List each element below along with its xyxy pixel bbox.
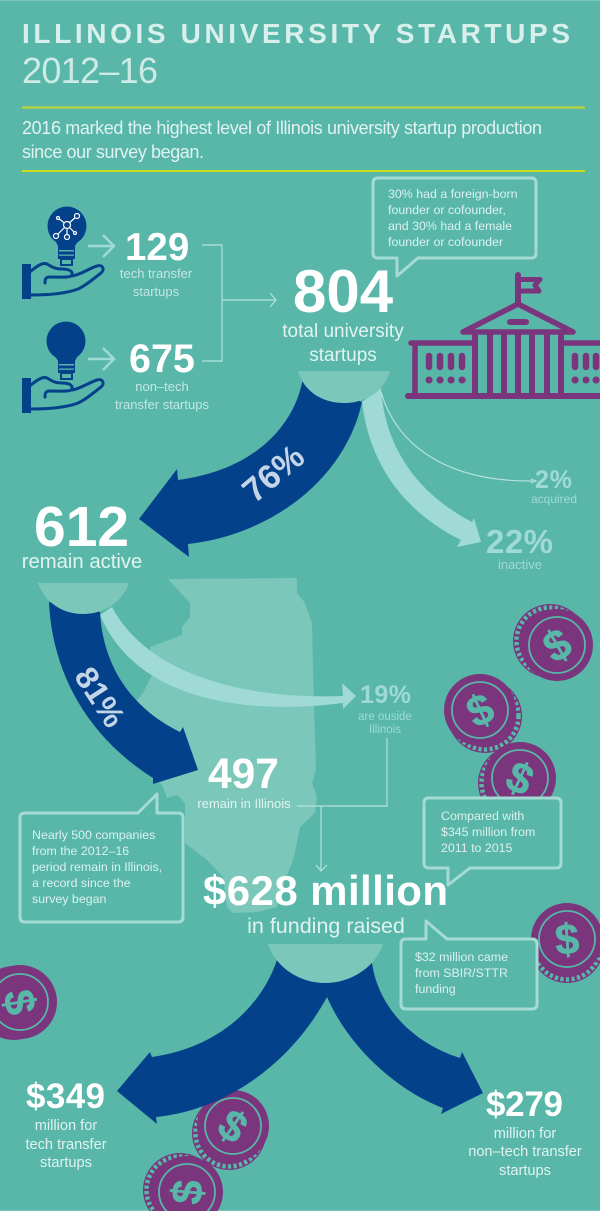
stat: 497 remain in Illinois: 497 [208,751,279,798]
callout: SBIR/STTR funding: funding [415,982,456,996]
stat: $349 million for tech transfer: million for [35,1118,97,1134]
coin 7: $ [163,1178,213,1206]
stat: $279 million for non-tech transfer [468,1085,582,1179]
coin 6 [192,1090,269,1170]
callout: SBIR/STTR funding [401,921,537,1009]
coin 1: $ [535,619,580,673]
arrow: 2 percent acquired [381,392,536,483]
arrow: 22 percent inactive [362,388,481,547]
icon: tech transfer bulb in hand [22,206,103,299]
stat: 497 remain in Illinois: remain in Illinois [197,796,291,811]
callout: compared with prior period: Compared with [441,809,524,823]
callout: 500 companies [20,794,183,922]
icon: non-tech transfer bulb in hand [22,322,103,413]
stat: 675 non-tech transfer startups [115,337,209,412]
callout: founders: founder or cofounder [388,235,503,249]
arrow: connector to funding [297,738,387,871]
stat: 675 non-tech transfer startups: transfer startups [115,397,209,412]
callout: founders: founder or cofounder, [388,203,506,217]
stat: $349 million for tech transfer: startups [40,1155,92,1171]
subtitle: years: 2012–16 [22,50,158,91]
stat: 22% inactive: inactive [498,557,542,572]
callout: compared with prior period: $345 million from [441,825,535,839]
callout: 500 companies: survey began [32,892,107,906]
stat: $279 million for non-tech transfer: non–tech transfer [468,1144,582,1160]
arrow: left funding to tech transfer [117,955,345,1124]
stat: $279 million for non-tech transfer: $279 [486,1085,563,1124]
coin 4: $ [553,915,581,965]
callout: 500 companies: period remain in Illinois, [32,860,162,874]
stat: $279 million for non-tech transfer: startups [499,1163,551,1179]
arrow: bulb to 675 [88,348,114,370]
coin 3: $ [499,752,541,806]
intro text [22,118,542,162]
bowl: funding raised [268,944,383,983]
stat: 804 total university startups: 804 [293,258,394,325]
label: 81%: 81% [67,660,133,734]
stat: 804 total university startups [282,258,404,366]
stat: 2% acquired: acquired [531,492,577,506]
coin 4 [530,903,600,983]
stat: 2% acquired: 2% [535,466,572,494]
stat: 2% acquired [531,466,577,506]
stat: 675 non-tech transfer startups: non–tech [135,379,189,394]
stat: 19% are outside Illinois: are ouside [358,711,412,723]
callout: 500 companies: a record since the [32,876,131,890]
stat: $628 million in funding raised: in funding raised [247,914,405,938]
callout: compared with prior period: 2011 to 2015 [441,841,513,855]
icon: university building [408,275,600,396]
stat: 129 tech transfer startups: startups [133,284,180,299]
stat: $279 million for non-tech transfer: million for [494,1126,556,1142]
stat: 497 remain in Illinois [197,751,291,811]
stat: $349 million for tech transfer: tech transfer [25,1137,107,1153]
coin 1 [513,604,593,681]
stat: $349 million for tech transfer: $349 [26,1077,105,1116]
label: 76%: 76% [235,437,312,510]
arrow: 81 percent remain in Illinois [49,602,198,784]
title: ILLINOIS UNIVERSITY STARTUPS [22,18,570,49]
arrow: right funding to non-tech transfer [300,955,483,1114]
stat: 612 remain active: remain active [22,551,142,573]
callout: founders: and 30% had a female [388,219,512,233]
callout: 500 companies: Nearly 500 companies [32,828,155,842]
stat: 22% inactive: 22% [486,523,553,560]
coin 3 [478,742,556,820]
stat: 612 remain active [22,495,142,573]
arrow: bracket to total [202,245,276,361]
coin 5 [0,965,57,1040]
coin 7 [143,1153,223,1211]
stat: 804 total university startups: total university [282,321,404,342]
stat: $628 million in funding raised [203,867,448,938]
stat: $349 million for tech transfer [25,1077,107,1171]
stat: 804 total university startups: startups [309,345,377,366]
stat: 19% are outside Illinois: Illinois [369,724,401,736]
stat: 19% are outside Illinois: 19% [360,681,411,709]
callout: compared with prior period [424,798,561,885]
stat: 129 tech transfer startups [120,226,193,299]
stat: 612 remain active: 612 [34,495,129,559]
stat: 19% are outside Illinois [358,681,412,736]
stat: 129 tech transfer startups: tech transfer [120,266,193,281]
arrow: 76 percent remain active [139,378,362,557]
stat: 675 non-tech transfer startups: 675 [129,337,195,381]
illinois map silhouette [125,578,317,913]
arrow: 19 percent outside Illinois [100,607,356,709]
intro text: 2016 marked the highest level of Illinois university startup production [22,118,542,138]
callout: SBIR/STTR funding: from SBIR/STTR [415,966,508,980]
callout: SBIR/STTR funding: $32 million came [415,950,508,964]
intro text: since our survey began. [22,142,204,162]
coin 6: $ [209,1100,256,1153]
arrow: bulb to 129 [88,235,114,257]
coin 2: $ [459,684,501,738]
stat: $628 million in funding raised: $628 million [203,867,448,914]
bowl: total startups [298,371,390,403]
callout: founders [373,178,536,276]
callout: founders: 30% had a foreign-born [388,187,518,201]
bowl: remain active [38,583,129,614]
coin 2 [444,674,522,753]
stat: 129 tech transfer startups: 129 [125,226,189,269]
callout: 500 companies: from the 2012–16 [32,844,129,858]
